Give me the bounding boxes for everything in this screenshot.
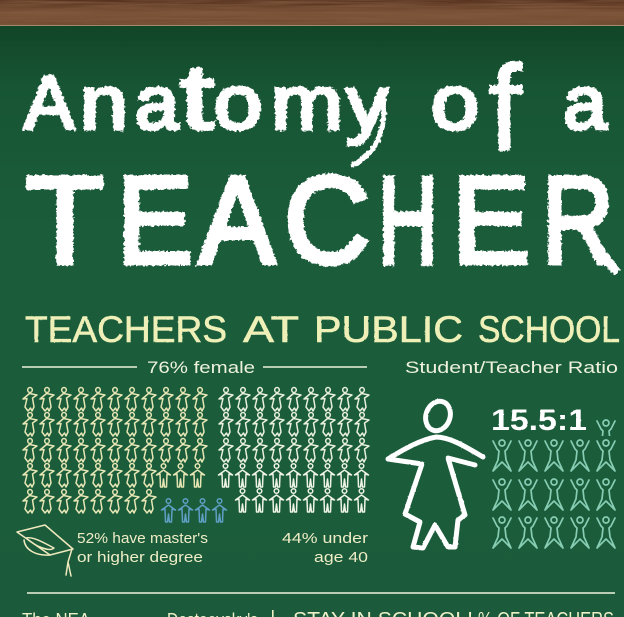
male teachers, left block	[156, 464, 204, 487]
pictogram: left block of teachers	[23, 388, 226, 522]
female teachers, right block	[219, 388, 369, 462]
female teachers, left block	[23, 388, 207, 513]
icon: large chalk teacher	[388, 398, 483, 548]
cut-off lower section headings	[22, 609, 614, 617]
title: Anatomy of a: n	[80, 61, 128, 146]
heading: teachers at public school: AT	[243, 309, 299, 350]
text: 44% under age 40	[282, 531, 368, 566]
heading: teachers at public school: TEACHERS	[25, 309, 227, 350]
title: TEACHER: H	[378, 152, 438, 290]
pictogram: students per teacher	[493, 420, 615, 548]
text: 52% masters: or higher degree	[77, 550, 203, 566]
title: Anatomy of a	[24, 40, 608, 176]
blue male teachers	[162, 499, 226, 522]
section divider	[27, 592, 615, 594]
title: TEACHER	[26, 152, 615, 290]
title: TEACHER: C	[284, 152, 370, 290]
title: Anatomy of a: A	[24, 61, 74, 146]
text: 52% masters: 52% have master's	[77, 531, 208, 547]
title: TEACHER: T	[26, 152, 104, 290]
title: Anatomy of a: y	[346, 61, 388, 146]
text: 52% masters	[77, 531, 208, 566]
title: Anatomy of a: a	[563, 61, 608, 146]
title: Anatomy of a: t	[180, 47, 214, 149]
pictogram: right block of teachers	[218, 388, 369, 512]
title: Anatomy of a: o	[214, 61, 262, 146]
title: TEACHER: E	[117, 152, 193, 290]
text: 44% under age 40: age 40	[314, 550, 368, 566]
heading: teachers at public school	[25, 309, 620, 350]
wooden frame	[0, 0, 624, 26]
title: Anatomy of a: a	[135, 61, 180, 146]
title: Anatomy of a: o	[431, 61, 479, 146]
title: Anatomy of a: m	[271, 61, 343, 146]
title: TEACHER: A	[199, 152, 275, 290]
icon: graduation cap	[17, 525, 73, 576]
title: TEACHER: E	[452, 152, 530, 290]
label: 76% female: 76% female	[147, 358, 255, 377]
ratio number: 15.5:1	[491, 404, 587, 437]
label: student teacher ratio: Student/Teacher Ratio	[405, 358, 618, 377]
title: Anatomy of a: f	[488, 40, 523, 176]
male teachers, right block	[218, 464, 368, 512]
text: 44% under age 40: 44% under	[282, 531, 368, 547]
heading: teachers at public school: PUBLIC	[314, 309, 463, 350]
